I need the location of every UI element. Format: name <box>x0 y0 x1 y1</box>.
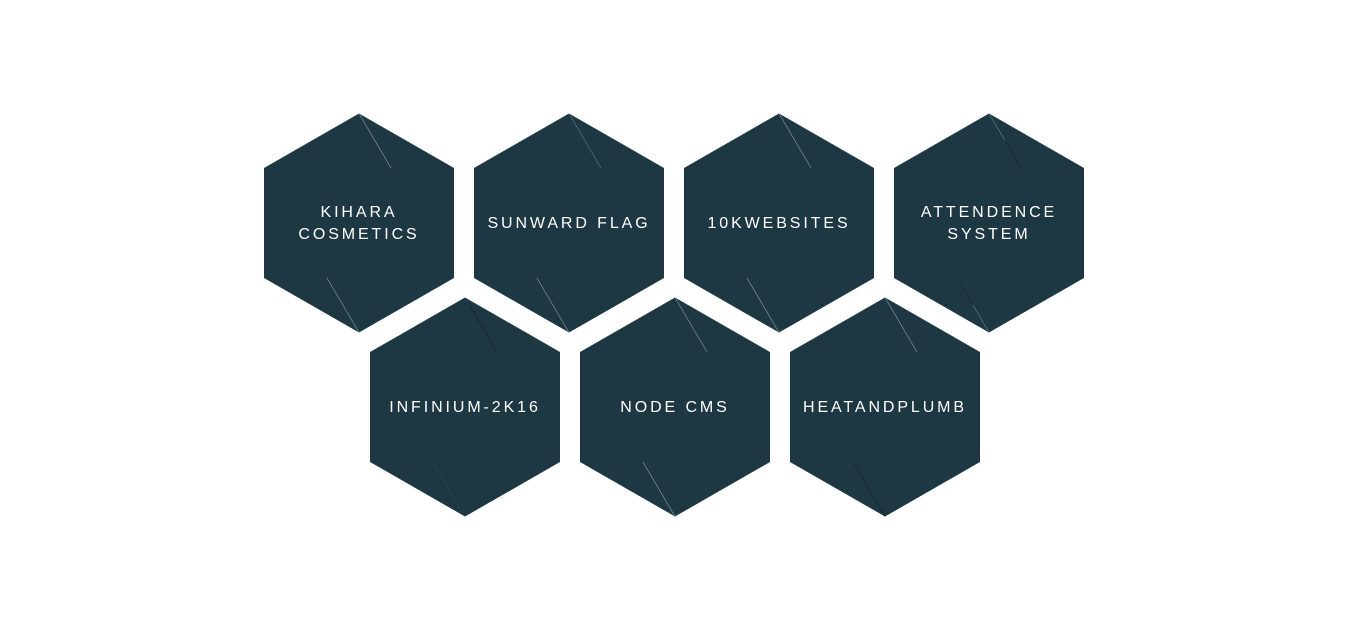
panel: Attendence System hexagon <box>894 113 1084 333</box>
panel: Node CMS hexagon <box>580 297 770 517</box>
label: Attendence System: ATTENDENCE <box>921 204 1057 221</box>
label: Kihara Cosmetics <box>298 204 420 243</box>
label: HeatAndPlumb: HEATANDPLUMB <box>803 399 967 416</box>
label: Infinium-2K16: INFINIUM-2K16 <box>389 399 541 416</box>
panel: 10KWebsites hexagon <box>684 113 874 333</box>
label: Kihara Cosmetics: COSMETICS <box>298 226 420 243</box>
label: Attendence System: SYSTEM <box>947 226 1031 243</box>
label: Node CMS: NODE CMS <box>620 399 730 416</box>
panel: Sunward Flag hexagon <box>474 113 664 333</box>
panel: Infinium-2K16 hexagon <box>370 298 560 516</box>
label: Kihara Cosmetics: KIHARA <box>320 204 397 221</box>
panel: HeatAndPlumb hexagon <box>790 297 980 517</box>
label: 10KWebsites: 10KWEBSITES <box>707 215 851 232</box>
panel: Kihara Cosmetics hexagon <box>264 113 454 333</box>
label: Sunward Flag: SUNWARD FLAG <box>487 215 651 232</box>
label: Attendence System <box>920 204 1057 243</box>
